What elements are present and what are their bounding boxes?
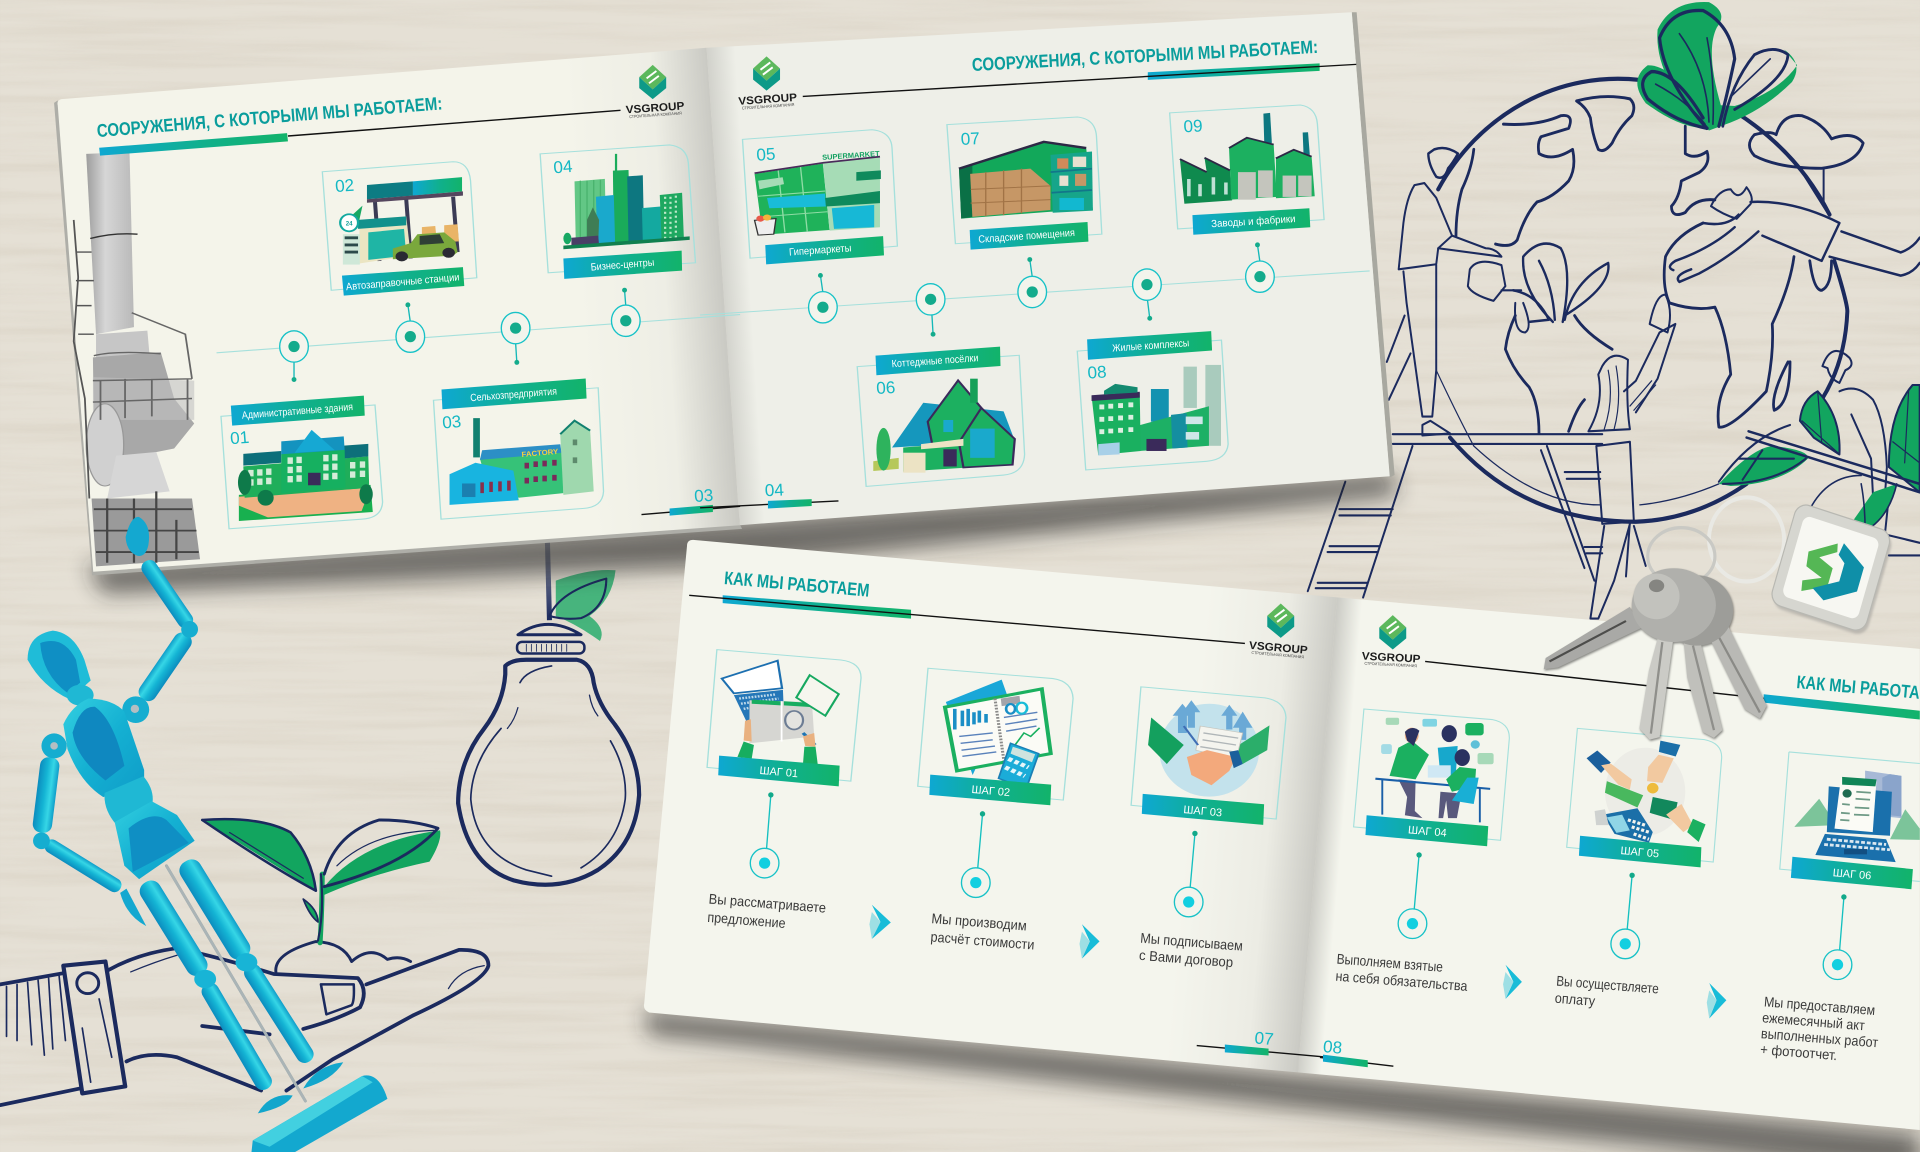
card 09 factories — [1170, 105, 1324, 229]
keyring with logo tag — [1648, 497, 1895, 637]
card labels and numbers: Бизнес-центры — [590, 258, 655, 274]
left page — [54, 48, 742, 575]
step labels — [759, 765, 1872, 882]
right page — [1298, 597, 1920, 1130]
card 01 administrative buildings — [221, 405, 383, 529]
step descriptions: Мы производим — [931, 910, 1027, 934]
heading left: СООРУЖЕНИЯ, С КОТОРЫМИ МЫ РАБОТАЕМ: — [96, 92, 443, 141]
step 6 card — [1780, 752, 1920, 889]
rings — [1648, 497, 1784, 585]
left page details — [689, 595, 1340, 1058]
book 1: construction types spread — [54, 12, 1395, 575]
step labels: ШАГ 02 — [971, 784, 1011, 799]
rule — [288, 110, 620, 136]
card 05 hypermarkets — [742, 130, 897, 258]
rod — [166, 866, 305, 1101]
waist — [104, 776, 153, 824]
torso — [63, 698, 144, 797]
step descriptions: Мы предоставляем — [1763, 993, 1876, 1018]
logo wordmark right: СТРОИТЕЛЬНАЯ КОМПАНИЯ — [1364, 661, 1417, 668]
card labels and numbers: Коттеджные посёлки — [891, 353, 979, 370]
logo wordmark left: СТРОИТЕЛЬНАЯ КОМПАНИЯ — [629, 110, 682, 119]
card labels and numbers: 05 — [756, 144, 776, 165]
logo left — [1267, 604, 1294, 638]
rule — [689, 595, 1245, 643]
card labels and numbers: 04 — [553, 156, 574, 177]
card labels and numbers: SUPERMARKET — [822, 149, 880, 162]
page number bar — [700, 499, 838, 508]
step descriptions: + фотоотчет. — [1760, 1041, 1838, 1063]
logo right — [753, 56, 780, 91]
label bars right page — [765, 208, 1310, 375]
arms — [32, 557, 196, 895]
card labels and numbers: 03 — [441, 411, 462, 432]
reaching arm — [1670, 177, 1920, 282]
step 4 card — [1354, 709, 1509, 846]
illustration: light bulb with leaf — [458, 539, 639, 885]
head — [28, 631, 91, 699]
step descriptions: оплату — [1554, 990, 1596, 1009]
step descriptions: выполненных работ — [1760, 1025, 1879, 1050]
left person — [1387, 148, 1529, 435]
illustration: globe with people — [1308, 2, 1920, 619]
big leaves — [1637, 2, 1797, 130]
card 08 residential complexes — [1077, 340, 1228, 470]
small leaf on globe — [1513, 244, 1608, 322]
book 1 shadow — [86, 473, 1398, 594]
key blades — [1544, 607, 1767, 740]
page number bar — [1320, 1055, 1393, 1067]
book 2: how we work spread — [644, 540, 1920, 1130]
logo wordmark right: VSGROUP — [738, 92, 797, 108]
cloud — [1750, 116, 1863, 168]
hand outline — [0, 948, 488, 1105]
right person — [1822, 351, 1920, 555]
keys — [1544, 568, 1767, 740]
heading left: КАК МЫ РАБОТАЕМ — [723, 567, 870, 601]
card labels and numbers: FACTORY — [521, 447, 559, 459]
logo wordmark left: СТРОИТЕЛЬНАЯ КОМПАНИЯ — [1251, 650, 1304, 659]
left page — [644, 540, 1337, 1072]
card 03 agricultural enterprises — [433, 388, 604, 519]
card labels and numbers: 07 — [960, 128, 980, 149]
step labels: ШАГ 06 — [1832, 867, 1872, 882]
card labels and numbers: Гипермаркеты — [789, 243, 852, 259]
logo wordmark right: VSGROUP — [1361, 651, 1421, 666]
page numbers: 08 — [1322, 1036, 1343, 1058]
book 2 shadow — [644, 1010, 1920, 1152]
title bar — [1764, 694, 1920, 720]
rule — [1425, 661, 1764, 698]
globe outline — [1438, 79, 1847, 522]
page numbers: 07 — [1254, 1027, 1274, 1049]
logo wordmark right: СТРОИТЕЛЬНАЯ КОМПАНИЯ — [742, 102, 795, 111]
card labels and numbers: 09 — [1183, 115, 1203, 136]
green leaves right — [1719, 385, 1920, 531]
step descriptions: Мы подписываем — [1140, 930, 1243, 954]
right page details — [1320, 661, 1920, 1067]
step labels: ШАГ 04 — [1408, 824, 1447, 840]
card 04 business centres — [540, 145, 695, 273]
pelvis — [115, 801, 195, 879]
card labels and numbers: 24 — [346, 220, 353, 227]
card labels and numbers — [229, 115, 1310, 506]
card labels and numbers: 01 — [229, 427, 250, 448]
step descriptions — [707, 891, 1879, 1063]
title bar — [723, 595, 911, 619]
step descriptions: ежемесячный акт — [1762, 1009, 1866, 1033]
step 5 card — [1567, 728, 1722, 867]
card labels and numbers: 02 — [334, 175, 355, 196]
logo wordmark left: VSGROUP — [1249, 640, 1308, 657]
rod over pelvis — [166, 866, 305, 1101]
right page — [707, 12, 1395, 525]
logo left — [639, 65, 666, 99]
sprout — [320, 874, 322, 943]
step descriptions: с Вами договор — [1139, 947, 1234, 970]
base — [251, 1075, 387, 1152]
step descriptions: Выполняем взятые — [1336, 951, 1444, 975]
soil — [276, 942, 411, 972]
step 1 card — [707, 650, 861, 786]
platform and ladders — [1308, 434, 1646, 597]
continents — [1456, 97, 1832, 433]
factory photo — [74, 152, 200, 566]
card 02 gas stations — [322, 162, 477, 290]
step nodes — [750, 792, 1852, 980]
hands and joints — [33, 517, 198, 926]
title bar — [1148, 63, 1320, 80]
step arrows — [869, 905, 1726, 1019]
logo tag — [1768, 502, 1895, 637]
card labels and numbers: 06 — [876, 377, 896, 398]
step labels: ШАГ 05 — [1620, 845, 1659, 860]
card labels and numbers: 08 — [1087, 361, 1107, 383]
neck — [67, 685, 94, 706]
step descriptions: Вы рассматриваете — [708, 891, 827, 916]
rule — [803, 64, 1356, 96]
step descriptions: на себя обязательства — [1335, 968, 1468, 994]
left page details — [74, 110, 740, 566]
timeline nodes — [280, 242, 1274, 382]
card 07 warehouses — [947, 117, 1102, 244]
title bar — [99, 133, 288, 156]
step descriptions: расчёт стоимости — [930, 928, 1035, 953]
legs — [136, 856, 317, 1093]
step labels: ШАГ 03 — [1183, 804, 1222, 819]
card labels and numbers: Заводы и фабрики — [1211, 213, 1296, 230]
key heads — [1632, 568, 1733, 646]
card labels and numbers: Жилые комплексы — [1112, 338, 1190, 355]
page number bar — [641, 505, 740, 516]
card labels and numbers: 04 — [764, 479, 785, 500]
step 3 card — [1131, 687, 1286, 825]
card labels and numbers: Складские помещения — [978, 228, 1075, 246]
page numbers — [1254, 1027, 1343, 1058]
step labels: ШАГ 01 — [759, 765, 798, 780]
feet — [258, 1062, 343, 1113]
step descriptions: Вы осуществляете — [1556, 973, 1660, 997]
logo right — [1379, 615, 1406, 649]
step descriptions: предложение — [707, 909, 786, 931]
heading right: СООРУЖЕНИЯ, С КОТОРЫМИ МЫ РАБОТАЕМ: — [971, 36, 1318, 75]
woman with brush — [1588, 295, 1675, 619]
mannequin figure — [28, 517, 387, 1152]
logo wordmark left: VSGROUP — [625, 100, 685, 116]
timeline line — [700, 271, 1370, 315]
label bars left page — [231, 251, 682, 426]
card labels and numbers: 03 — [694, 485, 714, 506]
step 2 card — [918, 668, 1073, 805]
card 06 cottage villages — [857, 355, 1025, 486]
card labels and numbers: Административные здания — [242, 402, 353, 422]
card labels and numbers: Автозаправочные станции — [346, 272, 460, 293]
card labels and numbers: Сельхозпредприятия — [470, 386, 557, 404]
page number bar — [1197, 1045, 1340, 1058]
illustration: hand holding sprout — [0, 819, 488, 1105]
timeline line — [217, 315, 740, 353]
right page details — [700, 63, 1370, 508]
